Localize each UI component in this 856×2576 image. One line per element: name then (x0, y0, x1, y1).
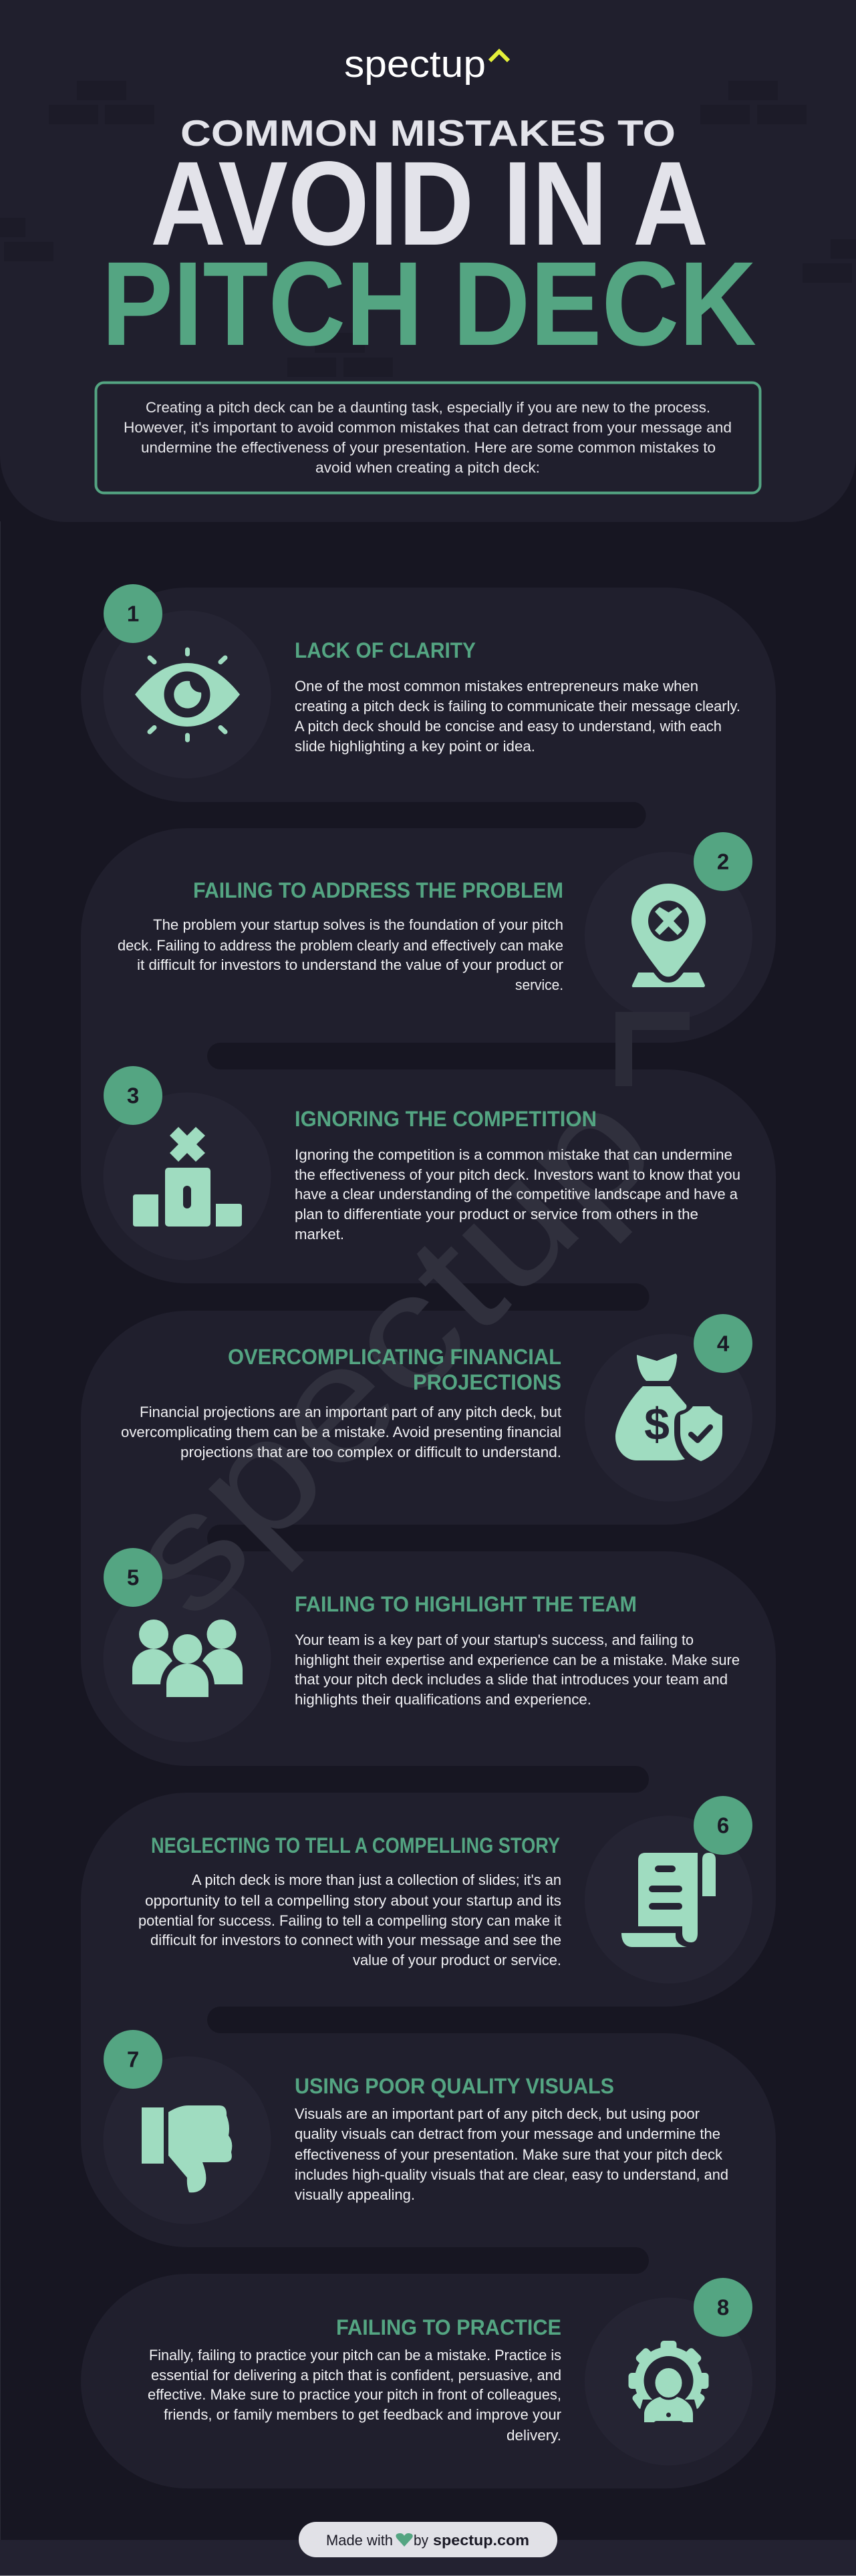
badge 5: 5 (127, 1565, 139, 1589)
card 3: ignoring the competition (104, 1066, 740, 1243)
body text: Ignoring the competition is a common mistake that can undermine (295, 1146, 732, 1163)
body text: opportunity to tell a compelling story about your startup and its (145, 1892, 561, 1909)
watermark: spectup: spectup (90, 1052, 687, 1649)
body text: potential for success. Failing to tell a compelling story can make it (138, 1912, 561, 1929)
body text (148, 2347, 561, 2444)
card 1: lack of clarity (104, 584, 740, 755)
body text (295, 2105, 728, 2203)
card 4: overcomplicating financial projections (121, 1314, 752, 1461)
badge 1: 1 (127, 602, 139, 626)
footer pill: made with love by spectup.com (299, 2522, 557, 2557)
icon: thumbs down (142, 2105, 232, 2192)
badge 5 (104, 1548, 162, 1607)
footer pill: made with love by spectup.com: spectup.com (433, 2532, 529, 2549)
title: COMMON MISTAKES TO (180, 112, 676, 154)
body text: A pitch deck is more than just a collection of slides; it's an (192, 1872, 561, 1888)
heading (228, 1345, 561, 1394)
body text (138, 1872, 561, 1968)
card 5: failing to highlight the team (104, 1548, 740, 1708)
heading: FAILING TO PRACTICE (336, 2315, 561, 2339)
body text: Finally, failing to practice your pitch can be a mistake. Practice is (149, 2347, 561, 2363)
body text: A pitch deck should be concise and easy to understand, with each (295, 718, 722, 735)
body text: Your team is a key part of your startup's success, and failing to (295, 1632, 694, 1648)
icon: money bag with shield (615, 1354, 722, 1461)
badge 7 (104, 2030, 162, 2089)
body text: delivery. (507, 2427, 561, 2444)
intro text box: However, it's important to avoid common mistakes that can detract from your message and (124, 419, 732, 436)
winding card background (81, 588, 776, 2488)
heading: OVERCOMPLICATING FINANCIAL (228, 1345, 561, 1369)
icon: map pin with x (631, 884, 706, 987)
body text: market. (295, 1226, 344, 1243)
badge 6: 6 (717, 1813, 729, 1838)
icon: money bag with shield: $ (644, 1399, 670, 1450)
badge 6 (694, 1796, 752, 1855)
badge 8: 8 (717, 2295, 729, 2319)
badge 8 (694, 2278, 752, 2337)
body text: Visuals are an important part of any pitch deck, but using poor (295, 2105, 700, 2122)
body text (295, 1146, 740, 1243)
icon: team (132, 1620, 243, 1697)
body text: overcomplicating them can be a mistake. Avoid presenting financial (121, 1424, 561, 1440)
header background panel (0, 0, 856, 522)
card 8: failing to practice (148, 2278, 752, 2444)
card 6: neglecting to tell a compelling story (138, 1796, 752, 1968)
body text: includes high-quality visuals that are clear, easy to understand, and (295, 2166, 728, 2183)
card 7: using poor quality visuals (104, 2030, 728, 2203)
icon: scroll document (621, 1853, 716, 1947)
body text: quality visuals can detract from your message and undermine the (295, 2126, 720, 2142)
badge 1 (104, 584, 162, 643)
body text: creating a pitch deck is failing to communicate their message clearly. (295, 698, 740, 715)
icon backdrop circles (103, 611, 752, 2465)
body text: value of your product or service. (353, 1952, 561, 1968)
body text (118, 916, 563, 993)
heading: IGNORING THE COMPETITION (295, 1107, 597, 1131)
card 2: failing to address the problem (118, 832, 752, 993)
heading: FAILING TO HIGHLIGHT THE TEAM (295, 1592, 637, 1616)
body text: visually appealing. (295, 2186, 415, 2203)
title (102, 112, 756, 370)
footer band (0, 2540, 856, 2576)
badge 4 (694, 1314, 752, 1373)
badge 3: 3 (127, 1083, 139, 1108)
icon: gear with person (621, 2341, 716, 2426)
footer pill: made with love by spectup.com: by (414, 2532, 428, 2549)
body text: it difficult for investors to understand the value of your product or (137, 956, 563, 973)
body text: Financial projections are an important part of any pitch deck, but (140, 1404, 561, 1420)
badge 3 (104, 1066, 162, 1125)
heading: PROJECTIONS (413, 1370, 561, 1394)
body text: One of the most common mistakes entrepreneurs make when (295, 678, 698, 694)
body text: plan to differentiate your product or service from others in the (295, 1206, 698, 1222)
body text: friends, or family members to get feedback and improve your (164, 2406, 561, 2423)
body text: deck. Failing to address the problem clearly and effectively can make (118, 937, 563, 954)
badge 2: 2 (717, 849, 729, 874)
body text: effectiveness of your presentation. Make sure that your pitch deck (295, 2146, 723, 2163)
body text (295, 1632, 740, 1708)
body text (121, 1404, 561, 1460)
logo: spectup: spectup (344, 43, 486, 86)
body text: difficult for investors to connect with your message and see the (150, 1932, 561, 1948)
body text: highlights their qualifications and experience. (295, 1691, 591, 1708)
body text: highlight their expertise and experience can be a mistake. Make sure (295, 1652, 740, 1668)
heading: LACK OF CLARITY (295, 638, 476, 662)
body text: essential for delivering a pitch that is confident, persuasive, and (151, 2367, 561, 2384)
badge 7: 7 (127, 2047, 139, 2072)
title: PITCH DECK (102, 237, 756, 370)
badge 4: 4 (717, 1331, 730, 1356)
intro text box: avoid when creating a pitch deck: (315, 459, 540, 476)
footer pill: made with love by spectup.com: Made with (326, 2532, 393, 2549)
intro text box (96, 382, 760, 493)
title: AVOID IN A (150, 136, 708, 270)
intro text box: undermine the effectiveness of your presentation. Here are some common mistakes to (141, 439, 716, 456)
intro text box: Creating a pitch deck can be a daunting task, especially if you are new to the process. (146, 399, 710, 416)
body text: effective. Make sure to practice your pitch in front of colleagues, (148, 2386, 561, 2403)
decorative brick blocks (0, 81, 856, 377)
body text: service. (515, 977, 563, 993)
body text: that your pitch deck includes a slide that introduces your team and (295, 1671, 728, 1688)
heading: USING POOR QUALITY VISUALS (295, 2074, 614, 2098)
badge 2 (694, 832, 752, 891)
heading: FAILING TO ADDRESS THE PROBLEM (193, 878, 563, 902)
body text: projections that are too complex or difficult to understand. (180, 1444, 561, 1460)
body text: slide highlighting a key point or idea. (295, 738, 535, 755)
body text: have a clear understanding of the competitive landscape and have a (295, 1186, 738, 1202)
icon: eye (135, 650, 240, 740)
icon: podium with x (133, 1127, 242, 1227)
body text (295, 678, 740, 755)
body text: the effectiveness of your pitch deck. Investors want to know that you (295, 1166, 740, 1183)
body text: The problem your startup solves is the foundation of your pitch (153, 916, 563, 933)
heading: NEGLECTING TO TELL A COMPELLING STORY (151, 1833, 560, 1857)
